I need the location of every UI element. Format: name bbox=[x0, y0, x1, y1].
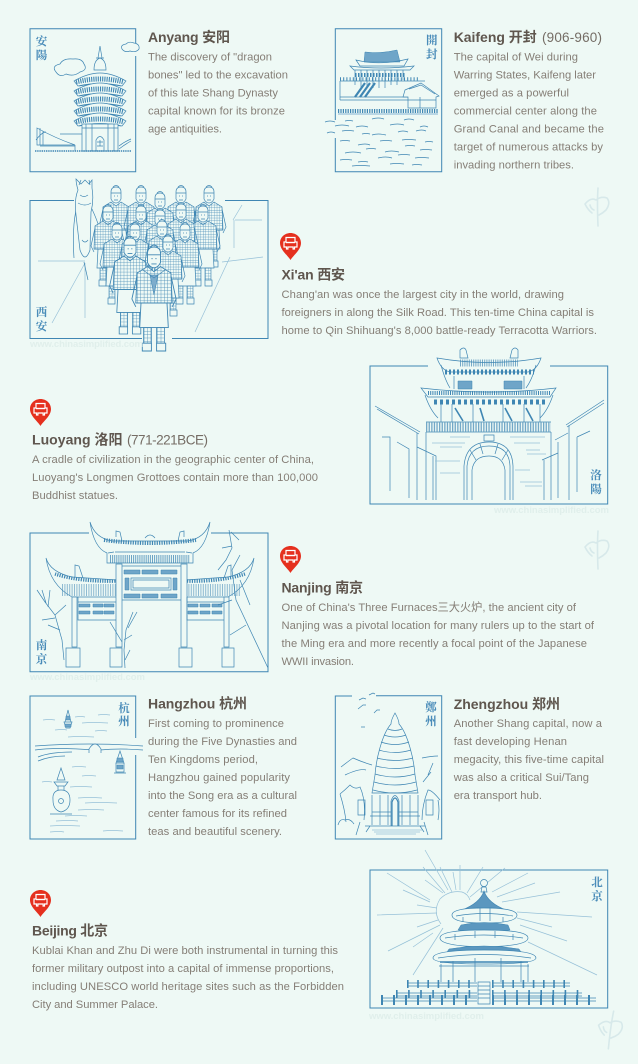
illustration: Nanjing memorial gate: 南 bbox=[36, 637, 48, 653]
illustration: Luoyang gate tower: 陽 bbox=[590, 481, 602, 497]
text: Luoyang description bbox=[32, 454, 318, 502]
watermark text: www.chinasimplified.com bbox=[29, 339, 143, 350]
text: Zhengzhou description: was also a critical Sui/Tang bbox=[453, 772, 589, 784]
watermark text: www.chinasimplified.com bbox=[29, 672, 145, 683]
panel: Hangzhou bbox=[30, 696, 297, 839]
illustration: Zhengzhou Songyue Pagoda: 州 bbox=[425, 713, 437, 729]
heading: Beijing: Beijing 北京 bbox=[32, 922, 108, 938]
panel: Zhengzhou bbox=[335, 693, 604, 839]
icon: map pin bbox=[280, 233, 301, 260]
heading: Anyang: Anyang 安阳 bbox=[148, 29, 230, 45]
text: Nanjing description: Nanjing was a pivotal location for many rulers up to the start of bbox=[282, 620, 595, 632]
watermark logo bbox=[585, 531, 609, 569]
panel: Kaifeng bbox=[325, 29, 604, 172]
heading: Luoyang bbox=[32, 432, 208, 448]
text: Zhengzhou description: fast developing Henan bbox=[454, 736, 567, 748]
text: Xi'an description: Chang'an was once the largest city in the world, drawing bbox=[282, 289, 564, 301]
text: Hangzhou description: Hangzhou gained popularity bbox=[148, 772, 290, 784]
text: Zhengzhou description: megacity, this five-time capital bbox=[454, 754, 604, 766]
illustration: Terracotta Warriors bbox=[30, 179, 268, 351]
text: Zhengzhou description: era transport hub. bbox=[454, 790, 542, 802]
text: Beijing description: Kublai Khan and Zhu Di were both instrumental in turning this bbox=[32, 945, 338, 957]
text: Anyang description: The discovery of "dragon bbox=[148, 52, 272, 64]
illustration: Zhengzhou Songyue Pagoda: 鄭 bbox=[425, 699, 437, 715]
illustration: Luoyang gate tower bbox=[370, 348, 608, 504]
illustration: Nanjing memorial gate: 京 bbox=[36, 651, 48, 667]
text: Kaifeng description: invading northern tribes. bbox=[454, 160, 574, 172]
icon: map pin bbox=[30, 890, 51, 917]
heading: Kaifeng bbox=[454, 29, 602, 45]
text: Beijing description: including UNESCO world heritage sites such as the Forbidden bbox=[32, 981, 344, 993]
text: Beijing description: former military outpost into a capital of immense proportions, bbox=[32, 963, 334, 975]
heading: Luoyang: Luoyang 洛阳 bbox=[32, 432, 122, 448]
illustration: Temple of Heaven bbox=[370, 850, 608, 1008]
icon: map pin bbox=[280, 546, 301, 573]
text: Hangzhou description: center famous for its refined bbox=[148, 808, 287, 820]
watermark logo bbox=[585, 188, 609, 226]
text: Hangzhou description: during the Five Dynasties and bbox=[148, 736, 297, 748]
text: Luoyang description: A cradle of civilization in the geographic center of China, bbox=[32, 454, 314, 466]
illustration: Kaifeng palace and canal bbox=[325, 29, 442, 172]
illustration: Terracotta Warriors: 西 bbox=[36, 304, 48, 320]
text: Anyang description bbox=[148, 52, 288, 136]
illustration: Anyang pagoda: 陽 bbox=[36, 47, 48, 63]
heading: Zhengzhou: Zhengzhou 郑州 bbox=[454, 696, 560, 712]
text: Kaifeng description: The capital of Wei during bbox=[454, 52, 578, 64]
icon: map pin bbox=[30, 399, 51, 426]
illustration: Zhengzhou Songyue Pagoda bbox=[335, 693, 442, 839]
text: Anyang description: age antiquities. bbox=[148, 124, 222, 136]
watermark text: www.chinasimplified.com bbox=[493, 505, 609, 516]
text: Kaifeng description: Warring States, Kaifeng later bbox=[454, 70, 596, 82]
heading: Xi'an: Xi'an 西安 bbox=[282, 266, 345, 282]
heading: Kaifeng: (906-960) bbox=[542, 30, 602, 45]
heading: Nanjing: Nanjing 南京 bbox=[282, 580, 363, 596]
panel: Luoyang bbox=[30, 348, 609, 516]
heading: Hangzhou: Hangzhou 杭州 bbox=[148, 696, 247, 712]
text: Kaifeng description: emerged as a powerful bbox=[454, 88, 569, 100]
illustration: Luoyang gate tower: 洛 bbox=[590, 467, 602, 483]
text: Xi'an description: home to Qin Shihuang's 8,000 battle-ready Terracotta Warriors. bbox=[282, 325, 597, 337]
text: Kaifeng description: commercial center along the bbox=[454, 106, 597, 118]
heading: Luoyang: (771-221BCE) bbox=[127, 432, 208, 448]
text: Hangzhou description: into the Song era as a cultural bbox=[148, 790, 297, 802]
text: Kaifeng description: Grand Canal and became the bbox=[454, 124, 604, 136]
text: Xi'an description: foreigners in along the Silk Road. This ten-time China capital is bbox=[282, 307, 594, 319]
panel: Beijing bbox=[30, 850, 608, 1022]
panel: Nanjing bbox=[29, 522, 595, 683]
illustration: Hangzhou West Lake: 州 bbox=[118, 713, 130, 729]
heading: Kaifeng: Kaifeng 开封 bbox=[454, 29, 537, 45]
panel: Anyang bbox=[30, 29, 288, 172]
text: Hangzhou description: teas and beautiful scenery. bbox=[148, 826, 282, 838]
text: Zhengzhou description: Another Shang capital, now a bbox=[454, 718, 603, 730]
illustration: Kaifeng palace and canal: 開 bbox=[426, 32, 437, 48]
watermark logo bbox=[595, 1009, 624, 1050]
text: Kaifeng description bbox=[454, 52, 604, 172]
illustration: Anyang pagoda: 安 bbox=[36, 33, 48, 49]
illustration: Temple of Heaven: 北 bbox=[591, 874, 603, 890]
illustration: Kaifeng palace and canal: 封 bbox=[426, 46, 438, 62]
text: Xi'an description bbox=[282, 289, 597, 337]
illustration: Temple of Heaven: 京 bbox=[591, 888, 603, 904]
text: Nanjing description: the Ming era and more recently a focal point of the Japanese bbox=[282, 638, 587, 650]
text: Luoyang description: Luoyang's Longmen Grottoes contain more than 100,000 bbox=[32, 472, 318, 484]
illustration: Terracotta Warriors: 安 bbox=[36, 318, 48, 334]
illustration: Nanjing memorial gate bbox=[30, 522, 268, 672]
text: Zhengzhou description bbox=[453, 718, 604, 802]
text: Beijing description bbox=[32, 945, 344, 1011]
text: Hangzhou description bbox=[148, 718, 297, 838]
illustration: Hangzhou West Lake bbox=[30, 696, 143, 839]
text: Anyang description: of this late Shang Dynasty bbox=[148, 88, 278, 100]
text: Beijing description: City and Summer Palace. bbox=[32, 999, 158, 1011]
illustration: Hangzhou West Lake: 杭 bbox=[118, 700, 130, 716]
text: Anyang description: capital known for its bronze bbox=[148, 106, 285, 118]
text: Nanjing description bbox=[282, 600, 595, 668]
text: Kaifeng description: target of numerous attacks by bbox=[454, 142, 603, 154]
illustration: Anyang pagoda bbox=[30, 29, 139, 172]
panel: Xi'an bbox=[29, 179, 597, 351]
text: Luoyang description: Buddhist statues. bbox=[32, 490, 118, 502]
watermark text: www.chinasimplified.com bbox=[368, 1011, 484, 1022]
text: Hangzhou description: First coming to prominence bbox=[148, 718, 284, 730]
text: Hangzhou description: Ten Kingdoms period, bbox=[148, 754, 258, 766]
text: Nanjing description: One of China's Three Furnaces三大火炉, the ancient city of bbox=[282, 600, 577, 614]
text: Anyang description: bones" led to the excavation bbox=[148, 70, 288, 82]
text: Nanjing description: WWII invasion. bbox=[282, 656, 354, 668]
